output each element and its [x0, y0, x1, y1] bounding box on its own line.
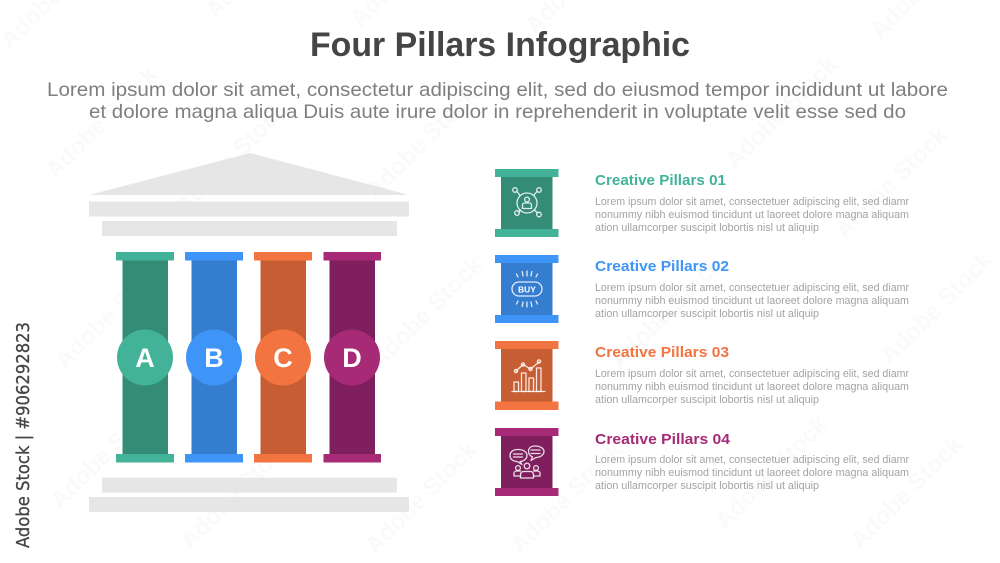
watermark pattern: Adobe Stock [45, 391, 168, 514]
pillar B [185, 252, 243, 462]
description 04: nonummy nibh euismod tincidunt ut laoreet dolore magna aliquam [595, 467, 909, 479]
watermark pattern: Adobe Stock [720, 51, 843, 174]
description 02 [595, 282, 909, 320]
watermark pattern: Adobe Stock [170, 96, 293, 219]
watermark pattern: Adobe Stock [875, 246, 998, 369]
item 04 [495, 428, 909, 496]
description 01: nonummy nibh euismod tincidunt ut laoreet dolore magna aliquam [595, 209, 909, 221]
watermark pattern: Adobe Stock [360, 436, 483, 559]
watermark pattern: Adobe Stock [505, 436, 628, 559]
pillar A [116, 252, 174, 462]
description 02: ation ullamcorper suscipit lobortis nisl ut aliquip [595, 308, 819, 320]
temple diagram [89, 153, 409, 512]
description 04: Lorem ipsum dolor sit amet, consectetuer adipiscing elit, sed diamr [595, 454, 909, 466]
item 01 [495, 169, 909, 237]
description 02: nonummy nibh euismod tincidunt ut laoreet dolore magna aliquam [595, 295, 909, 307]
pillar A: A [135, 343, 155, 373]
description 03: Lorem ipsum dolor sit amet, consectetuer adipiscing elit, sed diamr [595, 368, 909, 380]
upper beam [89, 202, 409, 216]
pillar C [254, 252, 312, 462]
heading 03: Creative Pillars 03 [595, 344, 729, 361]
pillar B: B [204, 343, 224, 373]
pillar C: C [273, 343, 293, 373]
icon pillar: buy: BUY [518, 284, 536, 294]
watermark pattern: Adobe Stock [830, 121, 953, 244]
upper step [102, 478, 397, 493]
icon pillar: bar chart [495, 341, 558, 410]
icon pillar: network person [495, 169, 558, 237]
description 03: ation ullamcorper suscipit lobortis nisl ut aliquip [595, 394, 819, 406]
watermark pattern: Adobe Stock [605, 251, 728, 374]
subtitle: et dolore magna aliqua Duis aute irure dolor in reprehenderit in voluptate velit esse sed do [89, 101, 906, 123]
description 01: ation ullamcorper suscipit lobortis nisl ut aliquip [595, 222, 819, 234]
watermark pattern: Adobe Stock [50, 251, 173, 374]
description 04: ation ullamcorper suscipit lobortis nisl ut aliquip [595, 480, 819, 492]
watermark pattern: Adobe Stock [365, 251, 488, 374]
icon pillar: buy [495, 255, 558, 323]
watermark pattern: Adobe Stock [360, 81, 483, 204]
description 04 [595, 454, 909, 492]
icon pillar: discussion group [495, 428, 558, 496]
description 01: Lorem ipsum dolor sit amet, consectetuer adipiscing elit, sed diamr [595, 196, 909, 208]
lower beam [102, 221, 397, 236]
title: Four Pillars Infographic [310, 26, 690, 64]
subtitle: Lorem ipsum dolor sit amet, consectetur adipiscing elit, sed do eiusmod tempor incididunt ut labore [47, 79, 948, 101]
watermark pattern: Adobe Stock [40, 61, 163, 184]
description 02: Lorem ipsum dolor sit amet, consectetuer adipiscing elit, sed diamr [595, 282, 909, 294]
pillar D: D [342, 343, 362, 373]
pillar D [324, 252, 381, 462]
item 02 [495, 255, 909, 323]
description 03 [595, 368, 909, 406]
lower step [89, 497, 409, 512]
subtitle [47, 79, 948, 123]
heading 02: Creative Pillars 02 [595, 258, 729, 275]
item 03 [495, 341, 909, 410]
description 03: nonummy nibh euismod tincidunt ut laoreet dolore magna aliquam [595, 381, 909, 393]
watermark pattern: Adobe Stock [175, 431, 298, 554]
description 01 [595, 196, 909, 234]
temple roof [89, 153, 409, 195]
heading 01: Creative Pillars 01 [595, 172, 726, 189]
stock credit: Adobe Stock | #906292823 [14, 322, 34, 548]
watermark pattern: Adobe Stock [845, 431, 968, 554]
heading 04: Creative Pillars 04 [595, 431, 731, 448]
watermark pattern: Adobe Stock [710, 411, 833, 534]
